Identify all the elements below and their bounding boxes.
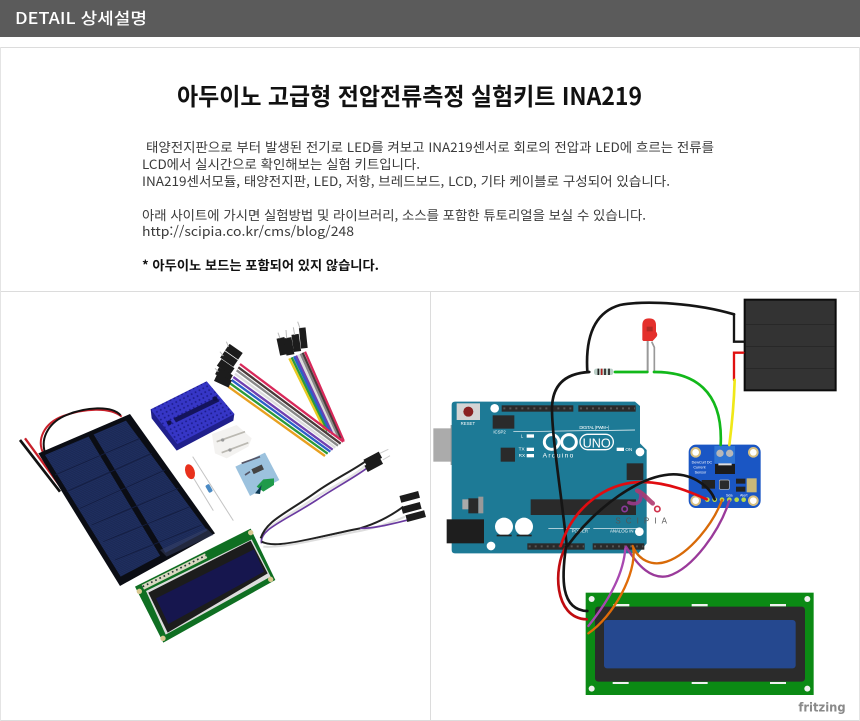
INA219 sensor board: Current	[693, 466, 706, 470]
mini breadboard	[151, 381, 234, 451]
Arduino Uno board	[433, 402, 647, 553]
notice: board not included: * 아두이노 보드는 포함되어 있지 않습니다.	[142, 255, 379, 274]
description text block: INA219센서모듈, 태양전지판, LED, 저항, 브레드보드, LCD, 기타 케이블로 구성되어 있습니다.	[142, 171, 670, 190]
INA219 sensor board	[689, 445, 761, 508]
description text block: LCD에서 실시간으로 확인해보는 실험 키트입니다.	[142, 154, 420, 173]
Arduino Uno board: RX	[519, 453, 526, 458]
white connector	[212, 425, 252, 458]
INA219 sensor board: DewCurt DC	[692, 460, 713, 464]
wires	[552, 303, 744, 633]
description text block	[142, 137, 714, 240]
Arduino Uno board: DIGITAL (PWM~)	[579, 425, 610, 430]
description text block: 아래 사이트에 가시면 실험방법 및 라이브러리, 소스를 포함한 튜토리얼을 보실 수 있습니다.	[142, 205, 646, 224]
LCD display	[586, 593, 814, 695]
SCIPIA watermark logo: SCIPIA	[615, 516, 668, 525]
INA219 sensor board: Sensor	[695, 471, 707, 475]
Arduino Uno board: RESET	[461, 421, 475, 426]
SCIPIA watermark logo	[615, 491, 668, 525]
Arduino Uno board: TX	[519, 447, 526, 452]
panel: kit components photo	[20, 322, 426, 643]
INA219 sensor board: Sda	[726, 494, 733, 498]
description text block: http://scipia.co.kr/cms/blog/248	[142, 221, 354, 240]
fritzing wordmark: fritzing	[798, 700, 846, 714]
solar cell	[745, 300, 836, 390]
Arduino Uno board: ON	[625, 447, 632, 452]
Arduino Uno board: POWER	[572, 528, 588, 533]
INA219 sensor board: Alert	[740, 494, 748, 498]
header bar	[0, 0, 860, 37]
description text block: 태양전지판으로 부터 발생된 전기로 LED를 켜보고 INA219센서로 회로의 전압과 LED에 흐르는 전류를	[146, 137, 714, 156]
rainbow jumper ribbon	[228, 352, 343, 456]
INA219 sensor module	[235, 453, 279, 496]
loose jumper cables	[261, 449, 426, 547]
LED and resistor	[594, 318, 657, 375]
header bar: DETAIL 상세설명	[15, 5, 147, 29]
LCD module	[135, 529, 275, 643]
jumper connector tips	[214, 322, 308, 388]
panel: fritzing wiring diagram	[433, 300, 846, 714]
Arduino Uno board: L	[521, 434, 524, 439]
solar panel with leads	[20, 408, 215, 586]
Arduino Uno board: ICSP2	[493, 430, 506, 435]
Arduino Uno board: Arduino	[543, 452, 574, 459]
Arduino Uno board: UNO	[583, 436, 611, 450]
title: 아두이노 고급형 전압전류측정 실험키트 INA219	[177, 77, 642, 112]
LED and resistor	[183, 457, 233, 521]
Arduino Uno board: ANALOG IN	[610, 528, 634, 533]
